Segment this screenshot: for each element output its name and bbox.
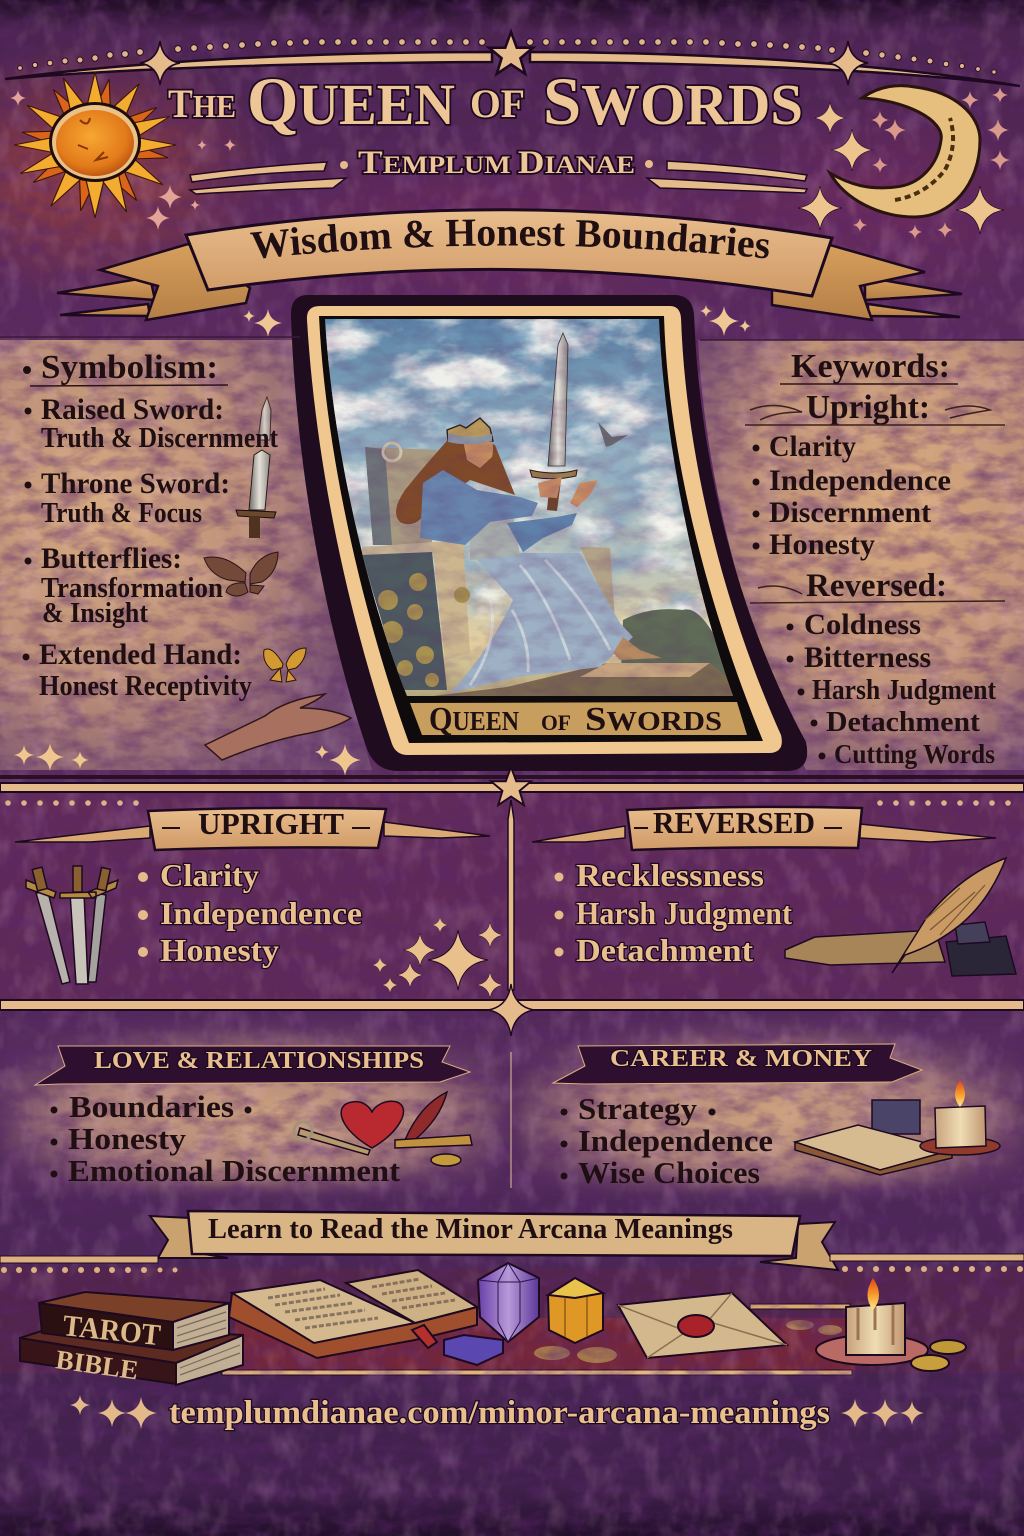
lower band lines and dots <box>0 1254 1024 1273</box>
love list: Boundaries <box>69 1089 234 1124</box>
career heading banner: CAREER & MONEY <box>610 1046 872 1072</box>
upright list: Independence <box>160 895 362 931</box>
upright list: Clarity <box>160 857 259 893</box>
upright heading banner <box>15 806 490 850</box>
card caption: OF <box>541 710 571 735</box>
symbolism text: Throne Sword: <box>41 467 230 500</box>
icon: extended hand <box>205 694 351 760</box>
icon: crescent moon <box>830 86 980 217</box>
career list: Strategy <box>578 1091 698 1126</box>
gown <box>450 553 633 693</box>
icon: candle on dish <box>816 1278 966 1371</box>
career list: Wise Choices <box>578 1155 760 1190</box>
career list <box>560 1091 773 1190</box>
icon: Tarot book: TAROT <box>61 1309 162 1352</box>
reversed list: Recklessness <box>576 857 764 893</box>
panel: symbolism parchment <box>0 340 372 770</box>
icon: blue stone <box>444 1335 503 1365</box>
keywords text: Bitterness <box>804 641 931 674</box>
lower faint centre line <box>510 1052 512 1188</box>
keywords text: Cutting Words <box>834 739 995 769</box>
throne <box>365 447 437 545</box>
icon: raised sword <box>258 397 271 440</box>
title: OF <box>470 81 525 126</box>
stone step <box>434 663 733 696</box>
title <box>168 63 803 139</box>
love heading banner <box>35 1046 470 1085</box>
icon: quill scroll and ink <box>785 858 1016 976</box>
title ribbon: Wisdom & Honest Boundaries <box>56 208 962 336</box>
keywords text: Upright: <box>806 389 930 426</box>
keywords text: Coldness <box>804 608 921 641</box>
card caption <box>410 701 747 738</box>
icon: ledger and candle <box>795 1080 1000 1175</box>
lower divider with star <box>0 984 1024 1036</box>
reversed list: Detachment <box>576 932 753 968</box>
icon: sealed envelope <box>618 1293 787 1358</box>
keywords text: Discernment <box>769 496 931 529</box>
top ornamental border <box>5 32 1020 86</box>
panel: keywords parchment <box>698 340 1024 770</box>
symbolism text: Extended Hand: <box>39 638 242 671</box>
distant trees <box>620 609 735 696</box>
icon: heart key and feather <box>294 1092 472 1166</box>
title: THE <box>168 81 236 126</box>
reversed list: Harsh Judgment <box>576 895 792 931</box>
decorative stars near sun and moon <box>10 87 1010 239</box>
panel: career parchment <box>518 1026 1024 1188</box>
symbolism text <box>22 349 279 702</box>
symbolism text: Butterflies: <box>41 542 182 575</box>
symbolism text: Honest Receptivity <box>39 671 252 702</box>
panel frames top lines <box>0 337 1024 340</box>
keywords text: Reversed: <box>806 568 947 604</box>
learn banner: Learn to Read the Minor Arcana Meanings <box>208 1213 733 1245</box>
learn banner <box>150 1211 838 1270</box>
love list <box>50 1089 401 1188</box>
tarot card: Queen of Swords <box>291 295 807 771</box>
stars cluster upright <box>372 917 503 998</box>
icon: sun <box>14 72 176 218</box>
card caption: QUEEN <box>429 701 519 738</box>
second sleeve <box>507 513 577 552</box>
symbolism text: & Insight <box>42 598 149 629</box>
love list: Emotional Discernment <box>68 1153 401 1188</box>
hair <box>396 432 515 524</box>
panel: love parchment <box>0 1026 504 1188</box>
keywords text: Independence <box>769 464 951 497</box>
face <box>463 440 493 468</box>
symbolism text: Symbolism: <box>41 349 218 386</box>
symbolism text: Raised Sword: <box>41 393 224 426</box>
reversed heading banner: REVERSED <box>653 805 815 840</box>
hands <box>538 477 598 507</box>
career heading banner <box>553 1044 922 1084</box>
keywords text: Detachment <box>826 706 980 738</box>
keywords text: Honesty <box>769 528 875 561</box>
center vertical divider <box>508 800 514 990</box>
title: QUEEN <box>247 63 455 139</box>
subtitle with flourishes: TEMPLUM DIANAE <box>358 145 635 181</box>
icon: purple crystal <box>478 1263 539 1342</box>
love heading banner: LOVE & RELATIONSHIPS <box>94 1048 424 1074</box>
symbolism text: Transformation <box>41 573 223 604</box>
symbolism text: Truth & Focus <box>41 498 202 529</box>
upright list: Honesty <box>160 932 279 968</box>
keywords text: Keywords: <box>791 348 950 385</box>
card illustration <box>320 316 740 701</box>
bird <box>598 422 628 447</box>
icon: open book <box>229 1270 477 1358</box>
icon: yellow crystal <box>548 1278 603 1343</box>
icon: small butterfly <box>264 648 306 682</box>
icon: butterfly <box>204 552 278 596</box>
upright heading banner: UPRIGHT <box>198 806 344 841</box>
paint grain <box>320 316 740 701</box>
icon: Tarot book <box>39 1292 229 1352</box>
crown <box>447 418 493 441</box>
icon: Bible book: BIBLE <box>54 1344 140 1385</box>
icon: throne sword <box>236 450 276 538</box>
queen's raised sword <box>548 333 568 466</box>
keywords text: Harsh Judgment <box>812 675 997 706</box>
reversed heading banner <box>532 805 996 850</box>
keywords text: Clarity <box>769 430 856 463</box>
bottom item band <box>222 1304 855 1375</box>
mantle and arm <box>420 470 538 545</box>
website url: templumdianae.com/minor-arcana-meanings <box>169 1395 830 1431</box>
upright list <box>138 857 362 968</box>
career list: Independence <box>578 1123 773 1158</box>
stars bottom left <box>14 743 361 776</box>
gown bodice <box>470 518 520 560</box>
title ribbon: Wisdom & Honest Boundaries: Wisdom & Honest Boundaries <box>250 220 769 258</box>
symbolism text: Truth & Discernment <box>41 423 279 454</box>
card caption: SWORDS <box>585 701 722 738</box>
reversed list <box>554 857 792 968</box>
icon: three swords <box>26 866 118 984</box>
foot <box>613 637 662 660</box>
love list: Honesty <box>68 1121 187 1156</box>
gown folds <box>470 560 610 685</box>
icon: Bible book <box>20 1325 243 1385</box>
title: SWORDS <box>543 63 803 139</box>
keywords text <box>745 348 1005 769</box>
upper divider with star <box>0 767 1024 806</box>
subtitle with flourishes <box>190 145 807 194</box>
